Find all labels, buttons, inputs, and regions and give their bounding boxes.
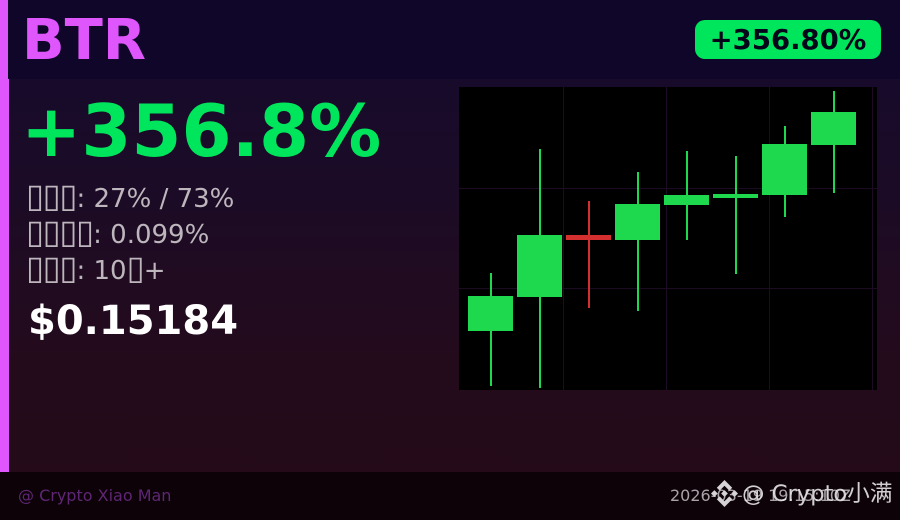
stat: funding rate: ▯▯▯▯: 0.099% [26, 212, 209, 251]
candle 5 [664, 151, 709, 240]
panel: header [8, 0, 900, 79]
price: $0.15184 [28, 298, 238, 344]
stat: long short ratio: ▯▯▯: 27% / 73% [26, 176, 234, 215]
headline change: +356.8% [21, 89, 381, 173]
candle 1 [468, 273, 513, 386]
candle 4 [615, 172, 660, 311]
candle 7 [762, 126, 807, 217]
candle 6 [713, 156, 758, 274]
panel: footer [0, 472, 900, 520]
stat: open interest: ▯▯▯: 10▯+ [26, 248, 166, 287]
change badge: +356.80% [710, 24, 866, 56]
footer handle: @ Crypto Xiao Man [18, 486, 171, 505]
candle 2 [517, 149, 562, 388]
left accent bar [0, 0, 9, 472]
candle 8 [811, 91, 856, 193]
watermark text: @ Crypto小满 [742, 481, 892, 507]
change badge [695, 20, 881, 59]
candle 3 [566, 201, 611, 308]
watermark icon: diamond logo [711, 480, 738, 507]
title: BTR [22, 8, 146, 73]
footer timestamp: 2026-03-19 19:15:10Z [670, 486, 851, 505]
